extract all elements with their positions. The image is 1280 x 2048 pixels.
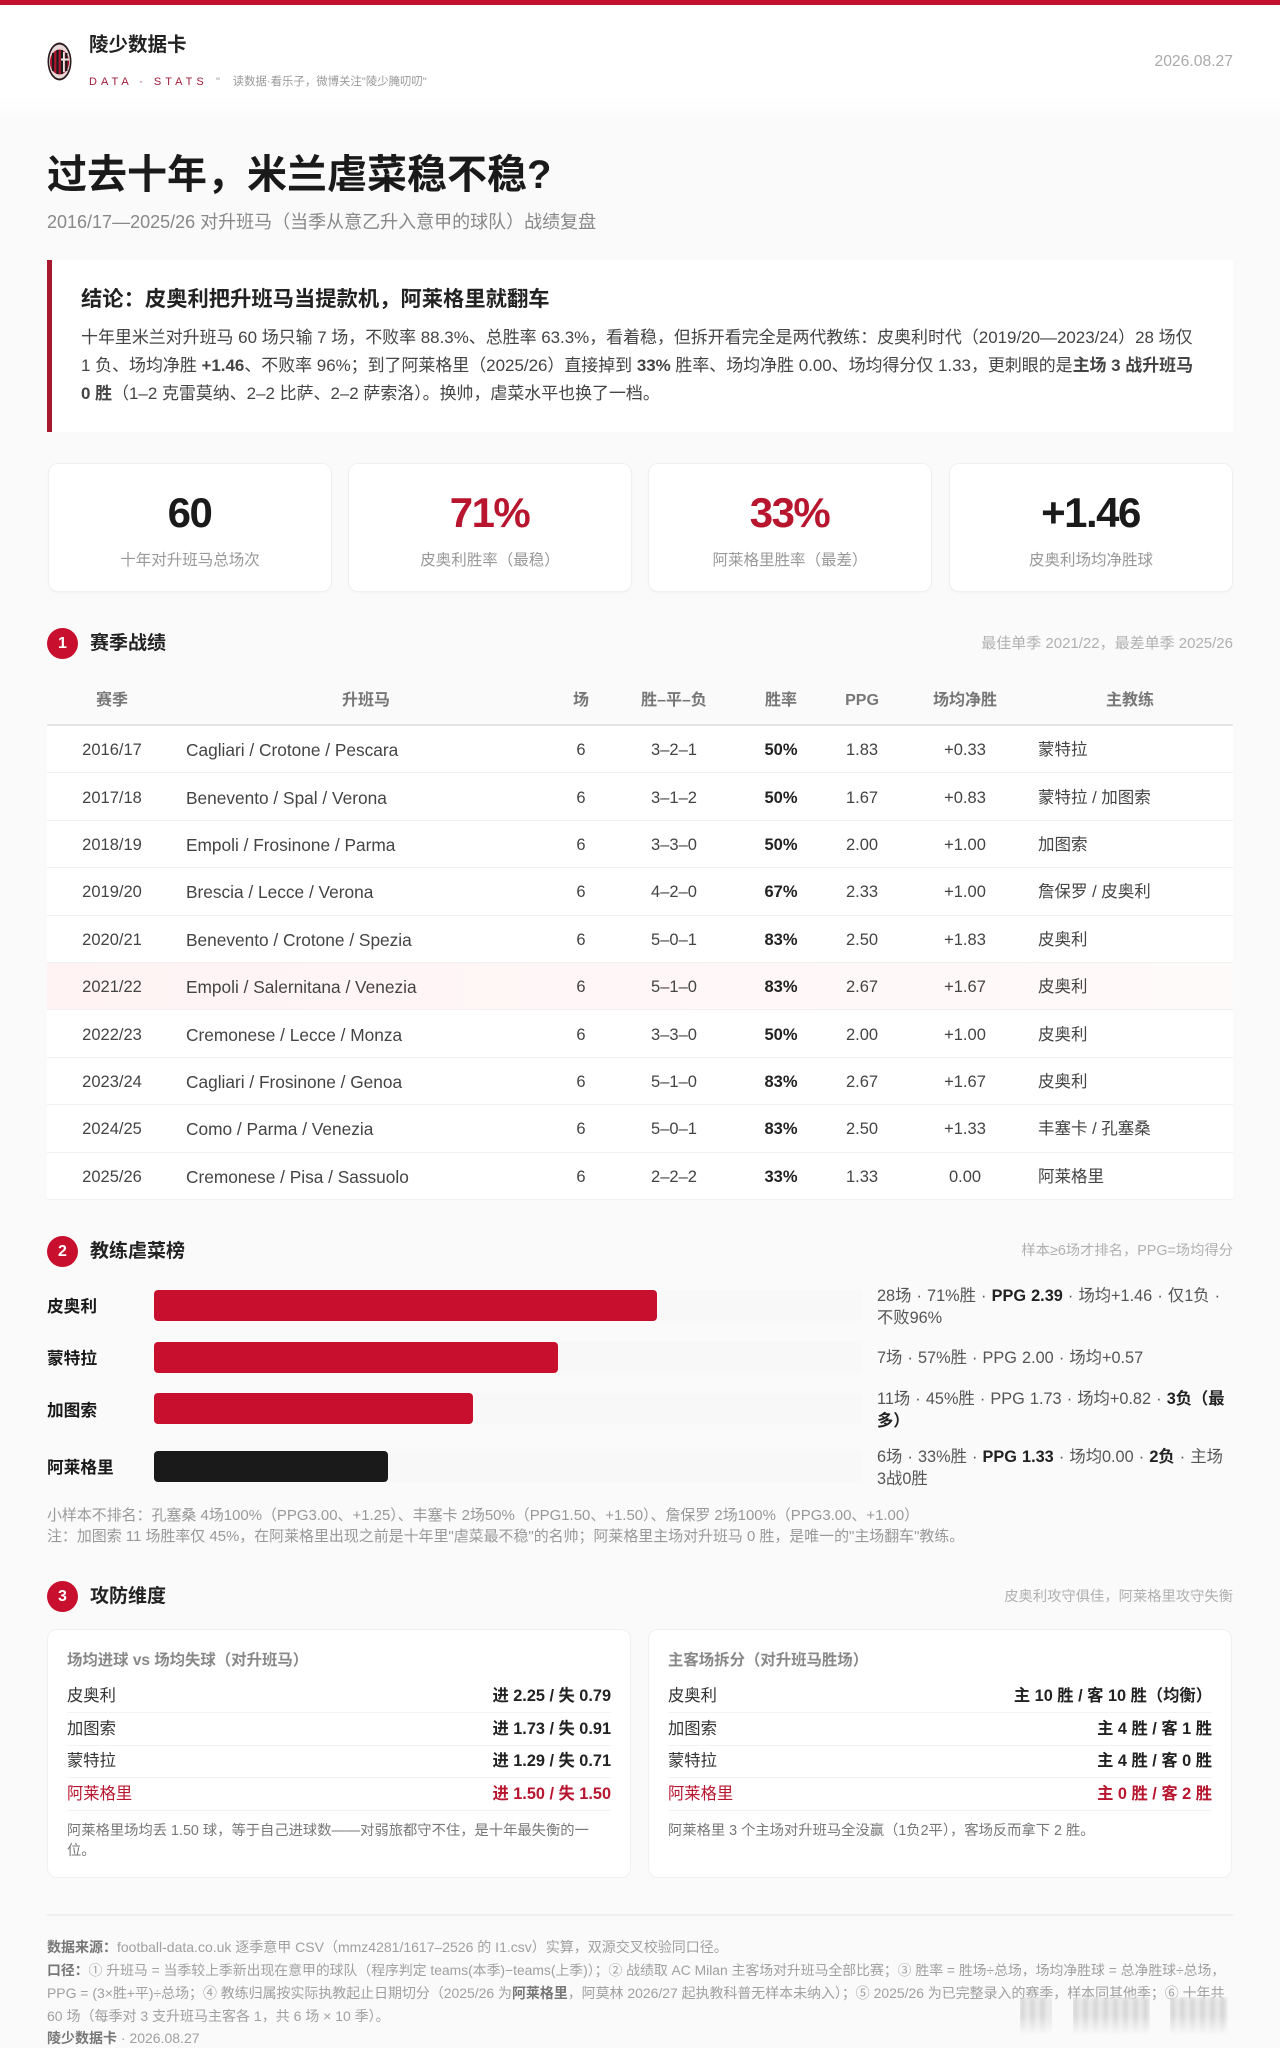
kpi card: total matches: 十年对升班马总场次 xyxy=(120,552,260,569)
section number 1: 1 xyxy=(58,635,67,652)
row 2019/20: 6 xyxy=(576,883,586,901)
bar stats: Allegri xyxy=(877,1448,1223,1488)
kpi card: Pioli win rate: 皮奥利胜率（最稳） xyxy=(420,552,560,569)
table header xyxy=(47,677,1233,726)
section heading: coach ranking: 教练虐菜榜 xyxy=(90,1241,185,1262)
row 2025/26: 6 xyxy=(576,1168,586,1186)
row 2022/23: 2022/23 xyxy=(82,1026,142,1044)
row 2023/24: 2.67 xyxy=(846,1073,878,1091)
title: 过去十年，米兰虐菜稳不稳? xyxy=(47,153,551,197)
row 2024/25: 83% xyxy=(764,1120,798,1138)
row 2023/24: 5–1–0 xyxy=(651,1073,697,1091)
ranking footnotes: 小样本不排名：孔塞桑 4场100%（PPG3.00、+1.25）、丰塞卡 2场50%（PPG1.50、+1.50）、詹保罗 2场100%（PPG3.00、+1.00） xyxy=(47,1507,919,1524)
bar stats: Gattuso xyxy=(877,1390,1225,1430)
row 2021/22 highlighted: 2.67 xyxy=(846,978,878,996)
bar stats: Allegri: 3战0胜 xyxy=(877,1470,928,1488)
row 2019/20: 詹保罗 / 皮奥利 xyxy=(1038,883,1151,901)
row: Gattuso: 主 4 胜 / 客 1 胜 xyxy=(1097,1720,1212,1738)
row 2017/18 xyxy=(47,773,1233,821)
kpi card: Pioli win rate xyxy=(348,463,632,592)
row 2022/23: Cremonese / Lecce / Monza xyxy=(186,1025,402,1045)
section note: season record: 最佳单季 2021/22，最差单季 2025/26 xyxy=(981,635,1233,652)
bar stats: Gattuso: 11场 · 45%胜 · PPG 1.73 · 场均+0.82 · 3负（最 xyxy=(877,1390,1225,1408)
footer: signature: 陵少数据卡 · 2026.08.27 xyxy=(47,2030,200,2046)
kpi card: Pioli goal difference: +1.46 xyxy=(1041,489,1140,536)
table header: 胜–平–负 xyxy=(641,692,707,708)
row: Gattuso: 进 1.73 / 失 0.91 xyxy=(492,1720,611,1738)
row 2022/23: +1.00 xyxy=(944,1026,986,1044)
row: Montella: 主 4 胜 / 客 0 胜 xyxy=(1097,1752,1212,1770)
row 2025/26: 33% xyxy=(764,1168,798,1186)
row 2024/25: 2.50 xyxy=(846,1120,878,1138)
row 2024/25: 丰塞卡 / 孔塞桑 xyxy=(1038,1120,1151,1138)
section number 3 xyxy=(47,1581,78,1612)
row 2025/26: 0.00 xyxy=(949,1168,981,1186)
section heading: attack and defence: 攻防维度 xyxy=(90,1586,166,1607)
row 2021/22 highlighted: 5–1–0 xyxy=(651,978,697,996)
section note: coach ranking: 样本≥6场才排名，PPG=场均得分 xyxy=(1021,1243,1233,1259)
row 2020/21: 6 xyxy=(576,931,586,949)
table header: 胜率 xyxy=(765,692,797,708)
row: Pioli: 主 10 胜 / 客 10 胜（均衡） xyxy=(1014,1687,1212,1705)
ranking footnotes xyxy=(47,1507,964,1545)
bar: Gattuso xyxy=(154,1393,862,1424)
panel note xyxy=(67,1822,589,1859)
row 2024/25: Como / Parma / Venezia xyxy=(186,1119,373,1139)
row 2025/26: 1.33 xyxy=(846,1168,878,1186)
row 2022/23 xyxy=(47,1010,1233,1058)
row 2017/18: 蒙特拉 / 加图索 xyxy=(1038,789,1151,807)
section heading: season record: 赛季战绩 xyxy=(90,633,166,654)
row: Allegri xyxy=(67,1778,611,1811)
row 2020/21: Benevento / Crotone / Spezia xyxy=(186,930,412,950)
callout body: 十年里米兰对升班马 60 场只输 7 场，不败率 88.3%、总胜率 63.3%，看着稳，但拆开看完全是两代教练：皮奥利时代（2019/20—2023/24）28 场仅 xyxy=(81,328,1193,347)
panel: conclusion callout xyxy=(47,260,1233,432)
row 2023/24: 2023/24 xyxy=(82,1073,142,1091)
row: Montella: 进 1.29 / 失 0.71 xyxy=(492,1752,611,1770)
section number 2 xyxy=(47,1236,78,1267)
row 2020/21: 5–0–1 xyxy=(651,931,697,949)
row 2021/22 highlighted: 2021/22 xyxy=(82,978,142,996)
row: Gattuso xyxy=(668,1713,1212,1746)
row 2020/21: 2020/21 xyxy=(82,931,142,949)
row 2020/21: 皮奥利 xyxy=(1038,931,1088,949)
brand tagline: " 读数据·看乐子，微博关注"陵少腌叨叨" xyxy=(216,76,427,88)
panel note: 阿莱格里 3 个主场对升班马全没赢（1负2平），客场反而拿下 2 胜。 xyxy=(668,1823,1095,1839)
row 2019/20: 2019/20 xyxy=(82,883,142,901)
row 2016/17: Cagliari / Crotone / Pescara xyxy=(186,740,398,760)
row 2025/26: 2–2–2 xyxy=(651,1168,697,1186)
row 2017/18: 1.67 xyxy=(846,789,878,807)
row: Allegri: 阿莱格里 xyxy=(668,1785,733,1803)
row 2018/19: +1.00 xyxy=(944,836,986,854)
callout body: 1 负、场均净胜 +1.46、不败率 96%；到了阿莱格里（2025/26）直接掉到 33% 胜率、场均净胜 0.00、场均得分仅 1.33，更刺眼的是主场 3 战升班马 xyxy=(81,356,1193,375)
row 2016/17: 蒙特拉 xyxy=(1038,741,1088,759)
row 2016/17 xyxy=(47,726,1233,773)
row: Gattuso xyxy=(67,1713,611,1746)
row 2018/19: 2018/19 xyxy=(82,836,142,854)
row: Pioli: 皮奥利 xyxy=(67,1687,116,1705)
panel note: 位。 xyxy=(67,1843,96,1859)
row 2020/21: +1.83 xyxy=(944,931,986,949)
table header: 赛季 xyxy=(96,692,128,708)
panel note: 阿莱格里场均丢 1.50 球，等于自己进球数——对弱旅都守不住，是十年最失衡的一 xyxy=(67,1823,589,1839)
section number 1 xyxy=(47,628,78,659)
row 2018/19: 50% xyxy=(764,836,798,854)
bar: Montella xyxy=(154,1342,862,1373)
panel: goals for vs against xyxy=(47,1629,631,1878)
row 2017/18: 6 xyxy=(576,789,586,807)
kpi card: Pioli goal difference xyxy=(949,463,1233,592)
row: Montella: 蒙特拉 xyxy=(668,1752,717,1770)
panel: home and away split xyxy=(648,1629,1232,1878)
brand tag: data stats: DATA · STATS xyxy=(89,76,208,88)
coach name: Montella: 蒙特拉 xyxy=(47,1349,97,1368)
row 2025/26: 2025/26 xyxy=(82,1168,142,1186)
brand name: 陵少数据卡 xyxy=(89,34,187,56)
row: Allegri: 进 1.50 / 失 1.50 xyxy=(492,1785,611,1803)
row 2016/17: 1.83 xyxy=(846,741,878,759)
row 2016/17: +0.33 xyxy=(944,741,986,759)
row 2021/22 highlighted: Empoli / Salernitana / Venezia xyxy=(186,977,417,997)
row 2022/23: 6 xyxy=(576,1026,586,1044)
row 2021/22 highlighted: 6 xyxy=(576,978,586,996)
row: Gattuso: 加图索 xyxy=(668,1720,717,1738)
callout heading: 结论：皮奥利把升班马当提款机，阿莱格里就翻车 xyxy=(81,287,550,311)
row 2018/19: 2.00 xyxy=(846,836,878,854)
row 2019/20: 2.33 xyxy=(846,883,878,901)
table header: PPG xyxy=(845,692,879,708)
kpi card: Allegri win rate xyxy=(648,463,932,592)
row 2023/24: 83% xyxy=(764,1073,798,1091)
callout body xyxy=(81,328,1193,403)
table header: 场 xyxy=(573,692,589,708)
row 2016/17: 50% xyxy=(764,741,798,759)
row 2024/25: 2024/25 xyxy=(82,1120,142,1138)
callout body: 0 胜（1–2 克雷莫纳、2–2 比萨、2–2 萨索洛）。换帅，虐菜水平也换了一档。 xyxy=(81,384,660,403)
row 2018/19: 加图索 xyxy=(1038,836,1088,854)
bar stats: Pioli: 28场 · 71%胜 · PPG 2.39 · 场均+1.46 · 仅1负 · xyxy=(877,1287,1220,1305)
row 2017/18: +0.83 xyxy=(944,789,986,807)
kpi card: total matches: 60 xyxy=(168,489,211,536)
row 2017/18: 3–1–2 xyxy=(651,789,697,807)
row 2025/26 xyxy=(47,1153,1233,1200)
row 2021/22 highlighted: 83% xyxy=(764,978,798,996)
row 2018/19: 3–3–0 xyxy=(651,836,697,854)
panel title: 场均进球 vs 场均失球（对升班马） xyxy=(67,1652,308,1669)
row 2020/21: 2.50 xyxy=(846,931,878,949)
footer: methodology: PPG = (3×胜+平)÷总场；④ 教练归属按实际执教起止日期切分（2025/26 为阿莱格里，阿莫林 2026/27 起执教科普无样本未纳入）；⑤ 2025/26 为已完整录入的赛季，样本同其他季；⑥ 十年共 xyxy=(47,1985,1224,2001)
row: Pioli xyxy=(67,1680,611,1713)
row 2016/17: 3–2–1 xyxy=(651,741,697,759)
row 2017/18: 2017/18 xyxy=(82,789,142,807)
row: Allegri: 阿莱格里 xyxy=(67,1785,132,1803)
table: season record xyxy=(47,691,1233,1200)
table header: 升班马 xyxy=(342,692,390,708)
table header: 场均净胜 xyxy=(933,692,997,708)
row: Pioli: 进 2.25 / 失 0.79 xyxy=(492,1687,611,1705)
ranking footnotes: 注：加图索 11 场胜率仅 45%，在阿莱格里出现之前是十年里"虐菜最不稳"的名帅；阿莱格里主场对升班马 0 胜，是唯一的"主场翻车"教练。 xyxy=(47,1528,964,1545)
row: Gattuso: 加图索 xyxy=(67,1720,116,1738)
row 2022/23: 50% xyxy=(764,1026,798,1044)
kpi card: Allegri win rate: 阿莱格里胜率（最差） xyxy=(712,552,868,569)
row 2022/23: 3–3–0 xyxy=(651,1026,697,1044)
row 2018/19 xyxy=(47,821,1233,868)
section note: attack and defence: 皮奥利攻守俱佳，阿莱格里攻守失衡 xyxy=(1004,1589,1233,1605)
row 2021/22 highlighted xyxy=(47,963,1233,1010)
row 2016/17: 6 xyxy=(576,741,586,759)
row: Pioli: 皮奥利 xyxy=(668,1687,717,1705)
row: Allegri: 主 0 胜 / 客 2 胜 xyxy=(1097,1785,1212,1803)
bar stats: Pioli xyxy=(877,1286,1220,1327)
row 2019/20: +1.00 xyxy=(944,883,986,901)
kpi card: Allegri win rate: 33% xyxy=(750,489,829,536)
kpi card: total matches xyxy=(48,463,332,592)
footer: methodology: 60 场（每季对 3 支升班马主客各 1，共 6 场 × 10 季）。 xyxy=(47,2008,390,2024)
row 2022/23: 2.00 xyxy=(846,1026,878,1044)
kpi card: Pioli goal difference: 皮奥利场均净胜球 xyxy=(1029,552,1153,569)
row 2019/20 xyxy=(47,868,1233,916)
bar stats: Pioli: 不败96% xyxy=(877,1309,942,1327)
row 2024/25 xyxy=(47,1105,1233,1153)
footer: data source: 数据来源：football-data.co.uk 逐季意甲 CSV（mmz4281/1617–2526 的 I1.csv）实算，双源交叉校验同口径。 xyxy=(47,1939,728,1955)
row 2021/22 highlighted: +1.67 xyxy=(944,978,986,996)
bar stats: Allegri: 6场 · 33%胜 · PPG 1.33 · 场均0.00 · 2负 · 主场 xyxy=(877,1448,1223,1466)
footer: methodology xyxy=(47,1962,1225,2024)
bar stats: Gattuso: 多） xyxy=(877,1412,910,1430)
row 2017/18: Benevento / Spal / Verona xyxy=(186,788,387,808)
row 2021/22 highlighted: 皮奥利 xyxy=(1038,978,1088,996)
row 2016/17: 2016/17 xyxy=(82,741,142,759)
row 2019/20: 4–2–0 xyxy=(651,883,697,901)
row: Allegri xyxy=(668,1778,1212,1811)
panel title: 主客场拆分（对升班马胜场） xyxy=(668,1652,868,1669)
section number 3: 3 xyxy=(58,1588,67,1605)
row: Pioli xyxy=(668,1680,1212,1713)
row 2019/20: 67% xyxy=(764,883,798,901)
coach name: Gattuso: 加图索 xyxy=(47,1401,97,1420)
bar stats: Montella: 7场 · 57%胜 · PPG 2.00 · 场均+0.57 xyxy=(877,1349,1143,1367)
row 2018/19: Empoli / Frosinone / Parma xyxy=(186,835,395,855)
row 2020/21: 83% xyxy=(764,931,798,949)
row 2023/24 xyxy=(47,1058,1233,1105)
row 2023/24: 皮奥利 xyxy=(1038,1073,1088,1091)
row 2019/20: Brescia / Lecce / Verona xyxy=(186,882,373,902)
row: Montella: 蒙特拉 xyxy=(67,1752,116,1770)
row 2023/24: +1.67 xyxy=(944,1073,986,1091)
coach name: Allegri: 阿莱格里 xyxy=(47,1458,114,1477)
row: Montella xyxy=(67,1745,611,1778)
header date: 2026.08.27 xyxy=(1154,53,1233,70)
row 2020/21 xyxy=(47,916,1233,963)
kpi card: Pioli win rate: 71% xyxy=(450,489,529,536)
section number 2: 2 xyxy=(58,1243,67,1260)
icon: AC Milan badge xyxy=(48,42,72,80)
bar: Pioli xyxy=(154,1290,862,1321)
row 2023/24: 6 xyxy=(576,1073,586,1091)
row 2025/26: 阿莱格里 xyxy=(1038,1168,1104,1186)
row 2025/26: Cremonese / Pisa / Sassuolo xyxy=(186,1167,409,1187)
row 2018/19: 6 xyxy=(576,836,586,854)
row 2024/25: +1.33 xyxy=(944,1120,986,1138)
coach name: Pioli: 皮奥利 xyxy=(47,1297,97,1316)
subtitle: 2016/17—2025/26 对升班马（当季从意乙升入意甲的球队）战绩复盘 xyxy=(47,212,596,232)
bar: Allegri xyxy=(154,1451,862,1482)
table header: 主教练 xyxy=(1106,692,1154,708)
row 2024/25: 5–0–1 xyxy=(651,1120,697,1138)
row 2024/25: 6 xyxy=(576,1120,586,1138)
row: Montella xyxy=(668,1745,1212,1778)
row 2017/18: 50% xyxy=(764,789,798,807)
row 2023/24: Cagliari / Frosinone / Genoa xyxy=(186,1072,402,1092)
row 2022/23: 皮奥利 xyxy=(1038,1026,1088,1044)
footer: methodology: 口径：① 升班马 = 当季较上季新出现在意甲的球队（程序判定 teams(本季)−teams(上季)）；② 战绩取 AC Milan 主客场对升班马全部比赛；③ 胜率 = 胜场÷总场，场均净胜球 = 总净胜球÷总场， xyxy=(47,1962,1225,1978)
